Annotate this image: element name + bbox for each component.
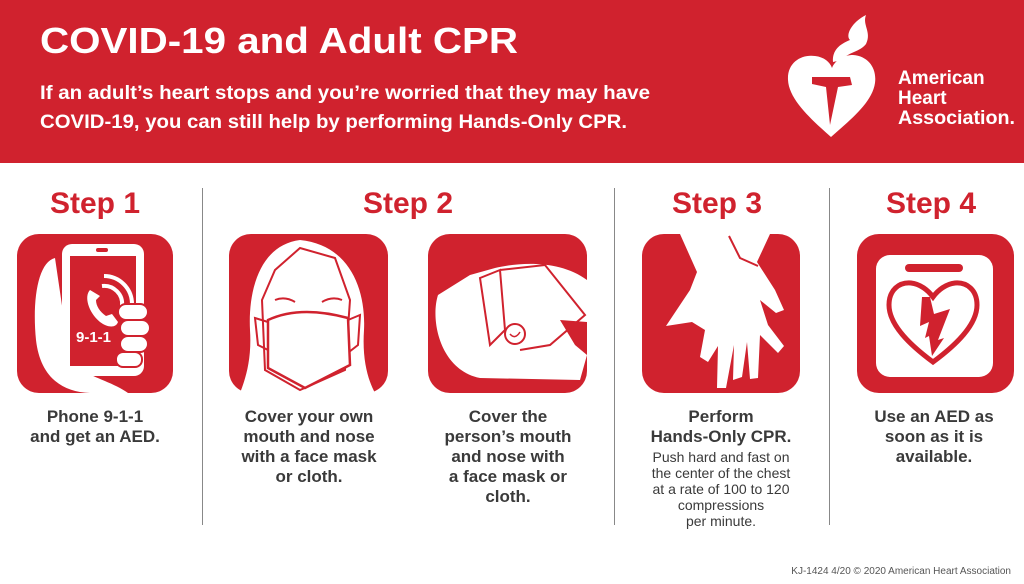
step headings: Step 4: [886, 187, 976, 220]
step texts: [30, 407, 994, 529]
text: step 2b: cloth.: [485, 487, 531, 506]
logo: American Heart Association: American: [898, 68, 985, 89]
text: step 3: the center of the chest: [652, 465, 790, 481]
text: step 2a: [240, 407, 377, 486]
text: step 2a: Cover your own: [245, 407, 373, 426]
text: step 3: per minute.: [686, 513, 756, 529]
logo: American Heart Association: Association.: [898, 108, 1015, 129]
icon: own face mask: [229, 234, 388, 393]
text: step 4: available.: [896, 447, 972, 466]
title: COVID-19 and Adult CPR: [40, 20, 518, 61]
text: step 4: [874, 407, 994, 466]
icon: hands-only CPR: [642, 234, 800, 393]
subtitle: COVID-19, you can still help by performing Hands-Only CPR.: [40, 112, 627, 133]
text: step 2b: a face mask or: [449, 467, 567, 486]
text: step 2b: Cover the: [469, 407, 547, 426]
text: step 3: Push hard and fast on: [652, 449, 790, 465]
text: step 2a: with a face mask: [240, 447, 377, 466]
icon: phone 9-1-1: [17, 234, 173, 393]
step headings: Step 3: [672, 187, 762, 220]
text: step 1: and get an AED.: [30, 427, 160, 446]
text: step 4: Use an AED as: [874, 407, 994, 426]
text: step 2b: [445, 407, 571, 506]
text: step 1: [30, 407, 160, 446]
icon: phone 9-1-1: 9-1-1: [76, 329, 111, 346]
header band: [0, 0, 1024, 163]
text: step 3: compressions: [678, 497, 764, 513]
text: step 2a: mouth and nose: [243, 427, 375, 446]
text: step 4: soon as it is: [885, 427, 983, 446]
icon: AED: [857, 234, 1014, 393]
text: step 1: Phone 9-1-1: [47, 407, 143, 426]
text: step 2a: or cloth.: [275, 467, 343, 486]
logo: American Heart Association: Heart: [898, 88, 947, 109]
text: step 3: Perform: [688, 407, 754, 426]
text: step 3: at a rate of 100 to 120: [652, 481, 790, 497]
subtitle: If an adult’s heart stops and you’re worried that they may have: [40, 83, 650, 104]
text: step 2b: and nose with: [451, 447, 565, 466]
step headings: Step 2: [363, 187, 453, 220]
step headings: [50, 187, 976, 220]
text: step 3: Hands-Only CPR.: [651, 427, 791, 446]
footer: KJ-1424 4/20 © 2020 American Heart Association: [791, 566, 1011, 577]
icon: cover person's face: [428, 234, 587, 393]
text: step 3: [651, 407, 791, 529]
subtitle: [40, 83, 650, 133]
text: step 2b: person’s mouth: [445, 427, 571, 446]
logo: American Heart Association: [788, 15, 1015, 137]
dividers: [202, 188, 830, 525]
step headings: Step 1: [50, 187, 140, 220]
